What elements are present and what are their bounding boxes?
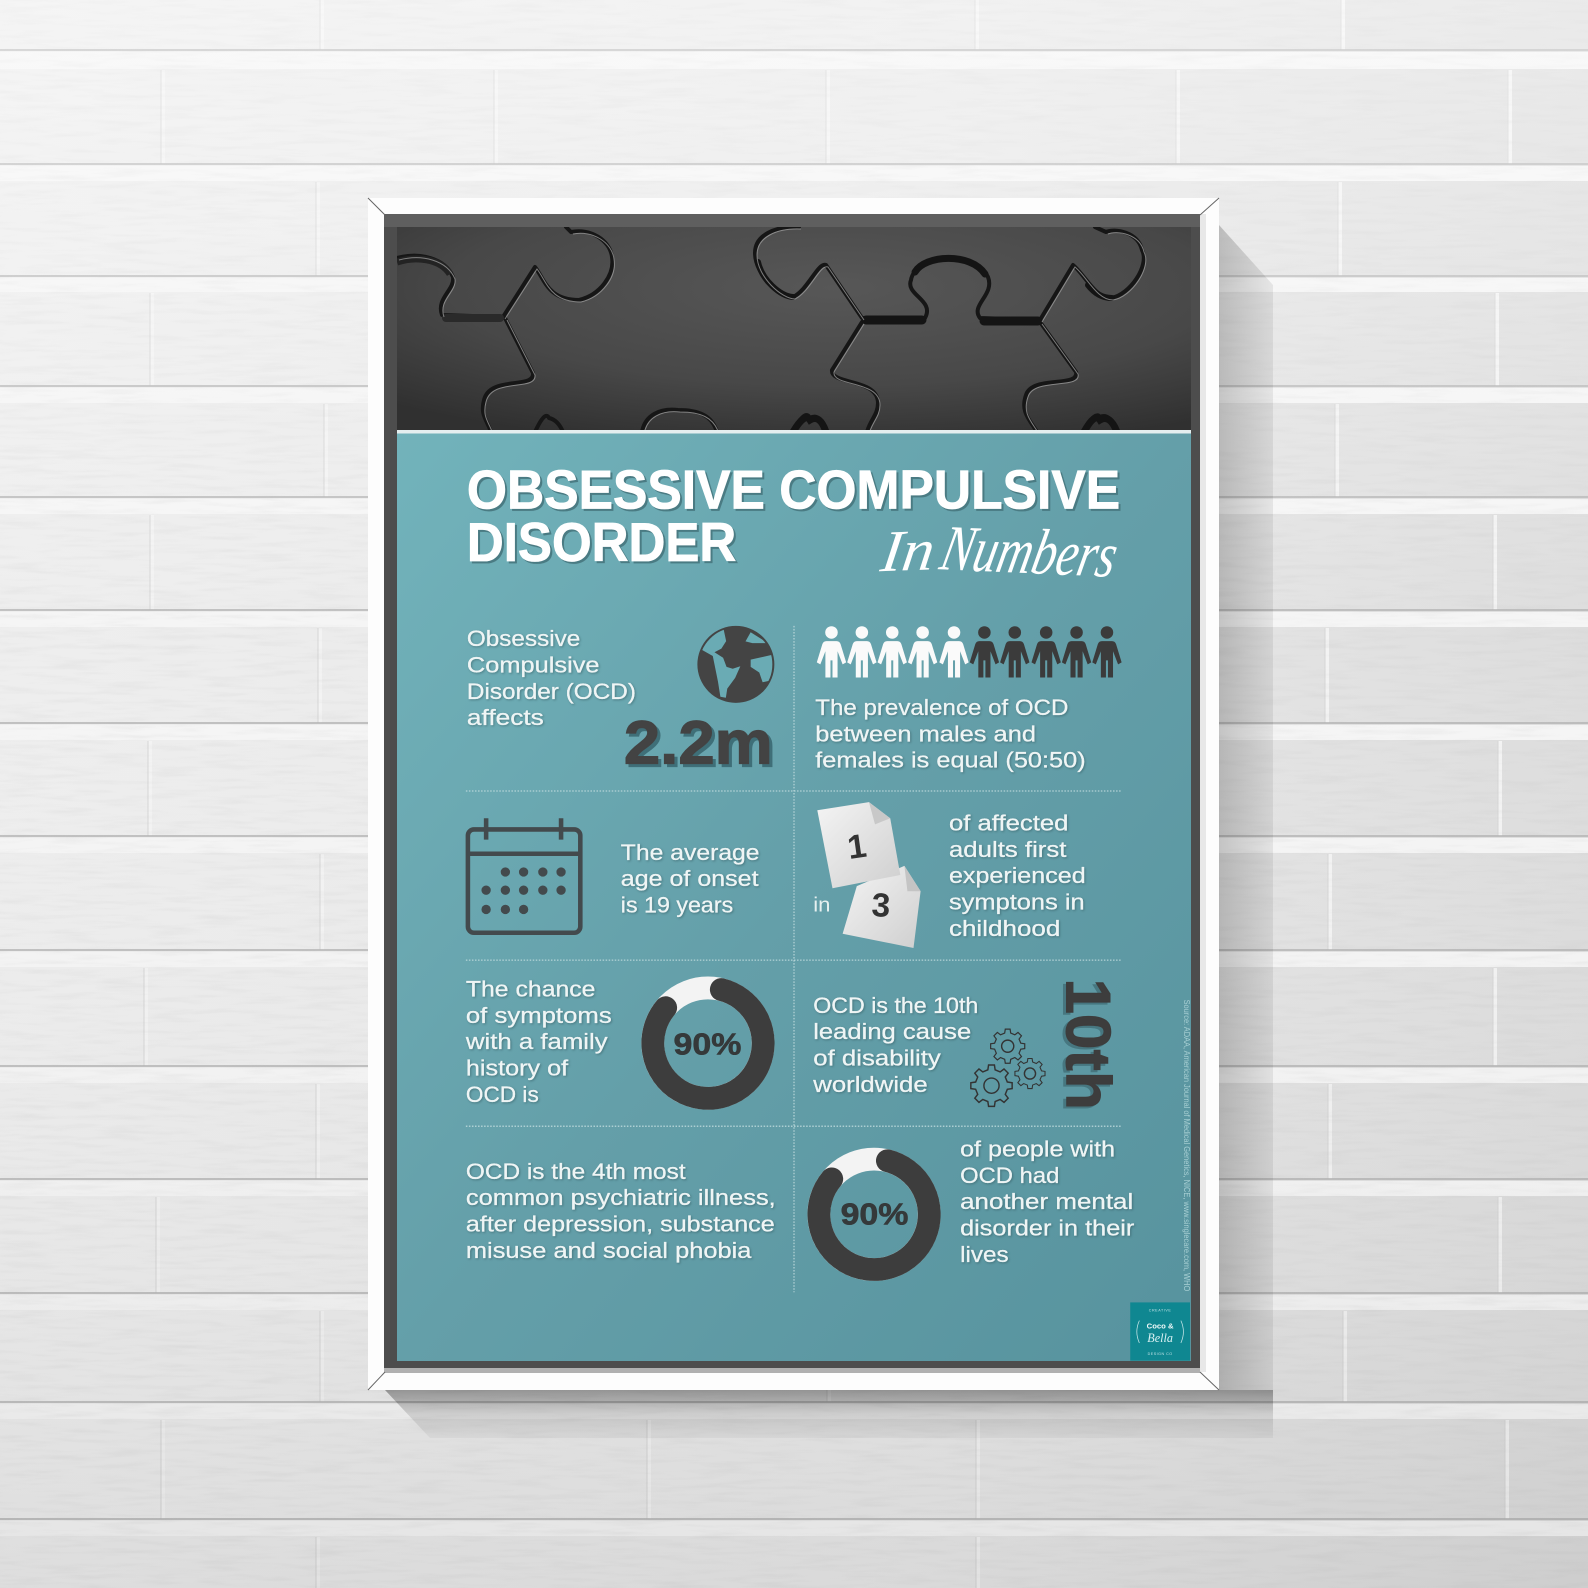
poster photo: black jigsaw puzzle — [397, 227, 1191, 434]
poster content — [465, 458, 1192, 1361]
title: OBSESSIVE COMPULSIVE — [467, 458, 1120, 520]
text: family history: OCD is — [466, 1082, 539, 1107]
text: another mental disorder — [960, 1137, 1135, 1267]
logo: Coco and Bella — [1130, 1302, 1190, 1361]
white picture frame — [368, 198, 1219, 1390]
panel: teal poster — [397, 430, 1191, 1361]
text: 4th most common: OCD is the 4th most — [466, 1159, 687, 1184]
text: 4th most common: misuse and social phobia — [466, 1238, 752, 1263]
icon: calendar — [468, 818, 580, 933]
text: another mental disorder: disorder in their — [960, 1216, 1135, 1241]
icon: globe — [698, 627, 775, 702]
title — [467, 458, 1120, 573]
text: adults childhood — [949, 810, 1086, 941]
text: 10th leading cause: worldwide — [812, 1072, 928, 1097]
icon: 1 in 3 paper notes: in — [813, 894, 830, 916]
text: family history: of symptoms — [466, 1003, 612, 1028]
text: another mental disorder: lives — [960, 1242, 1009, 1267]
text: prevalence: females is equal (50:50) — [815, 748, 1086, 773]
deep shadow sections of seams — [758, 258, 1117, 432]
frame shadow on wall — [385, 225, 1273, 1438]
stat: 2.2m: 2.2m — [624, 709, 773, 777]
text: adults childhood: adults first — [949, 837, 1067, 862]
text: prevalence: The prevalence of OCD — [815, 695, 1068, 720]
puzzle seams — [397, 227, 1144, 432]
text: age of onset: age of onset — [621, 866, 759, 891]
text: OCD affects: Obsessive — [467, 626, 580, 651]
subtitle: In Numbers: In — [876, 516, 939, 584]
text: another mental disorder: another mental — [960, 1189, 1133, 1214]
donut chart: 90% family history — [653, 988, 763, 1098]
text: prevalence — [815, 695, 1086, 773]
icon: 1 in 3 paper notes: 3 — [871, 887, 891, 925]
title: DISORDER — [467, 511, 736, 573]
stat: 10th rotated: 10th — [1052, 978, 1122, 1110]
logo: Coco and Bella: Bella — [1147, 1331, 1173, 1345]
text: age of onset: The average — [621, 840, 760, 865]
dotted dividers — [466, 626, 1122, 1292]
subtitle: In Numbers: Numbers — [934, 513, 1124, 592]
text: OCD affects: Disorder (OCD) — [467, 679, 636, 704]
source note: Source: ADAA, American Journal of Medical Genetics, NICE, www.singlecare.com, WHO — [1182, 1000, 1192, 1291]
text: 4th most common: after depression, substance — [466, 1212, 775, 1237]
text: 10th leading cause: of disability — [813, 1045, 942, 1070]
text: adults childhood: of affected — [949, 810, 1068, 835]
text: OCD affects — [467, 626, 636, 730]
text: OCD affects: affects — [467, 705, 544, 730]
icon: ten people, five white five dark — [817, 626, 1122, 678]
icon: 1 in 3 paper notes: 1 — [845, 828, 869, 867]
logo: Coco and Bella: CREATIVE — [1149, 1309, 1171, 1313]
text: family history — [465, 977, 612, 1107]
text: 4th most common — [466, 1159, 776, 1263]
text: family history: history of — [466, 1056, 569, 1081]
text: 4th most common: common psychiatric illness, — [466, 1185, 776, 1210]
donut chart: 90% other disorder: 90% — [841, 1197, 908, 1231]
icon: gears — [971, 1029, 1045, 1106]
text: family history: The chance — [466, 977, 596, 1002]
text: OCD affects: Compulsive — [467, 652, 600, 677]
stat: 2.2m: 2.2m — [627, 712, 776, 780]
text: age of onset: is 19 years — [621, 892, 733, 917]
donut chart: 90% other disorder — [819, 1159, 929, 1269]
text: adults childhood: childhood — [949, 916, 1060, 941]
text: adults childhood: experienced — [949, 863, 1086, 888]
text: prevalence: between males and — [815, 721, 1036, 746]
text: another mental disorder: OCD had — [960, 1163, 1059, 1188]
text: 10th leading cause: OCD is the 10th — [813, 993, 978, 1018]
text: 10th leading cause: leading cause — [813, 1019, 971, 1044]
text: another mental disorder: of people with — [960, 1137, 1115, 1162]
icon: 1 in 3 paper notes — [813, 802, 921, 948]
text: family history: with a family — [465, 1029, 609, 1054]
text: 10th leading cause — [812, 993, 978, 1097]
donut chart: 90% family history: 90% — [673, 1027, 741, 1061]
text: age of onset — [621, 840, 760, 917]
subtitle: In Numbers — [876, 513, 1124, 592]
stat: 10th rotated: 10th — [1049, 980, 1119, 1112]
text: adults childhood: symptons in — [949, 889, 1085, 914]
logo: Coco and Bella: DESIGN CO — [1148, 1352, 1173, 1356]
logo: Coco and Bella: Coco & — [1147, 1322, 1174, 1331]
